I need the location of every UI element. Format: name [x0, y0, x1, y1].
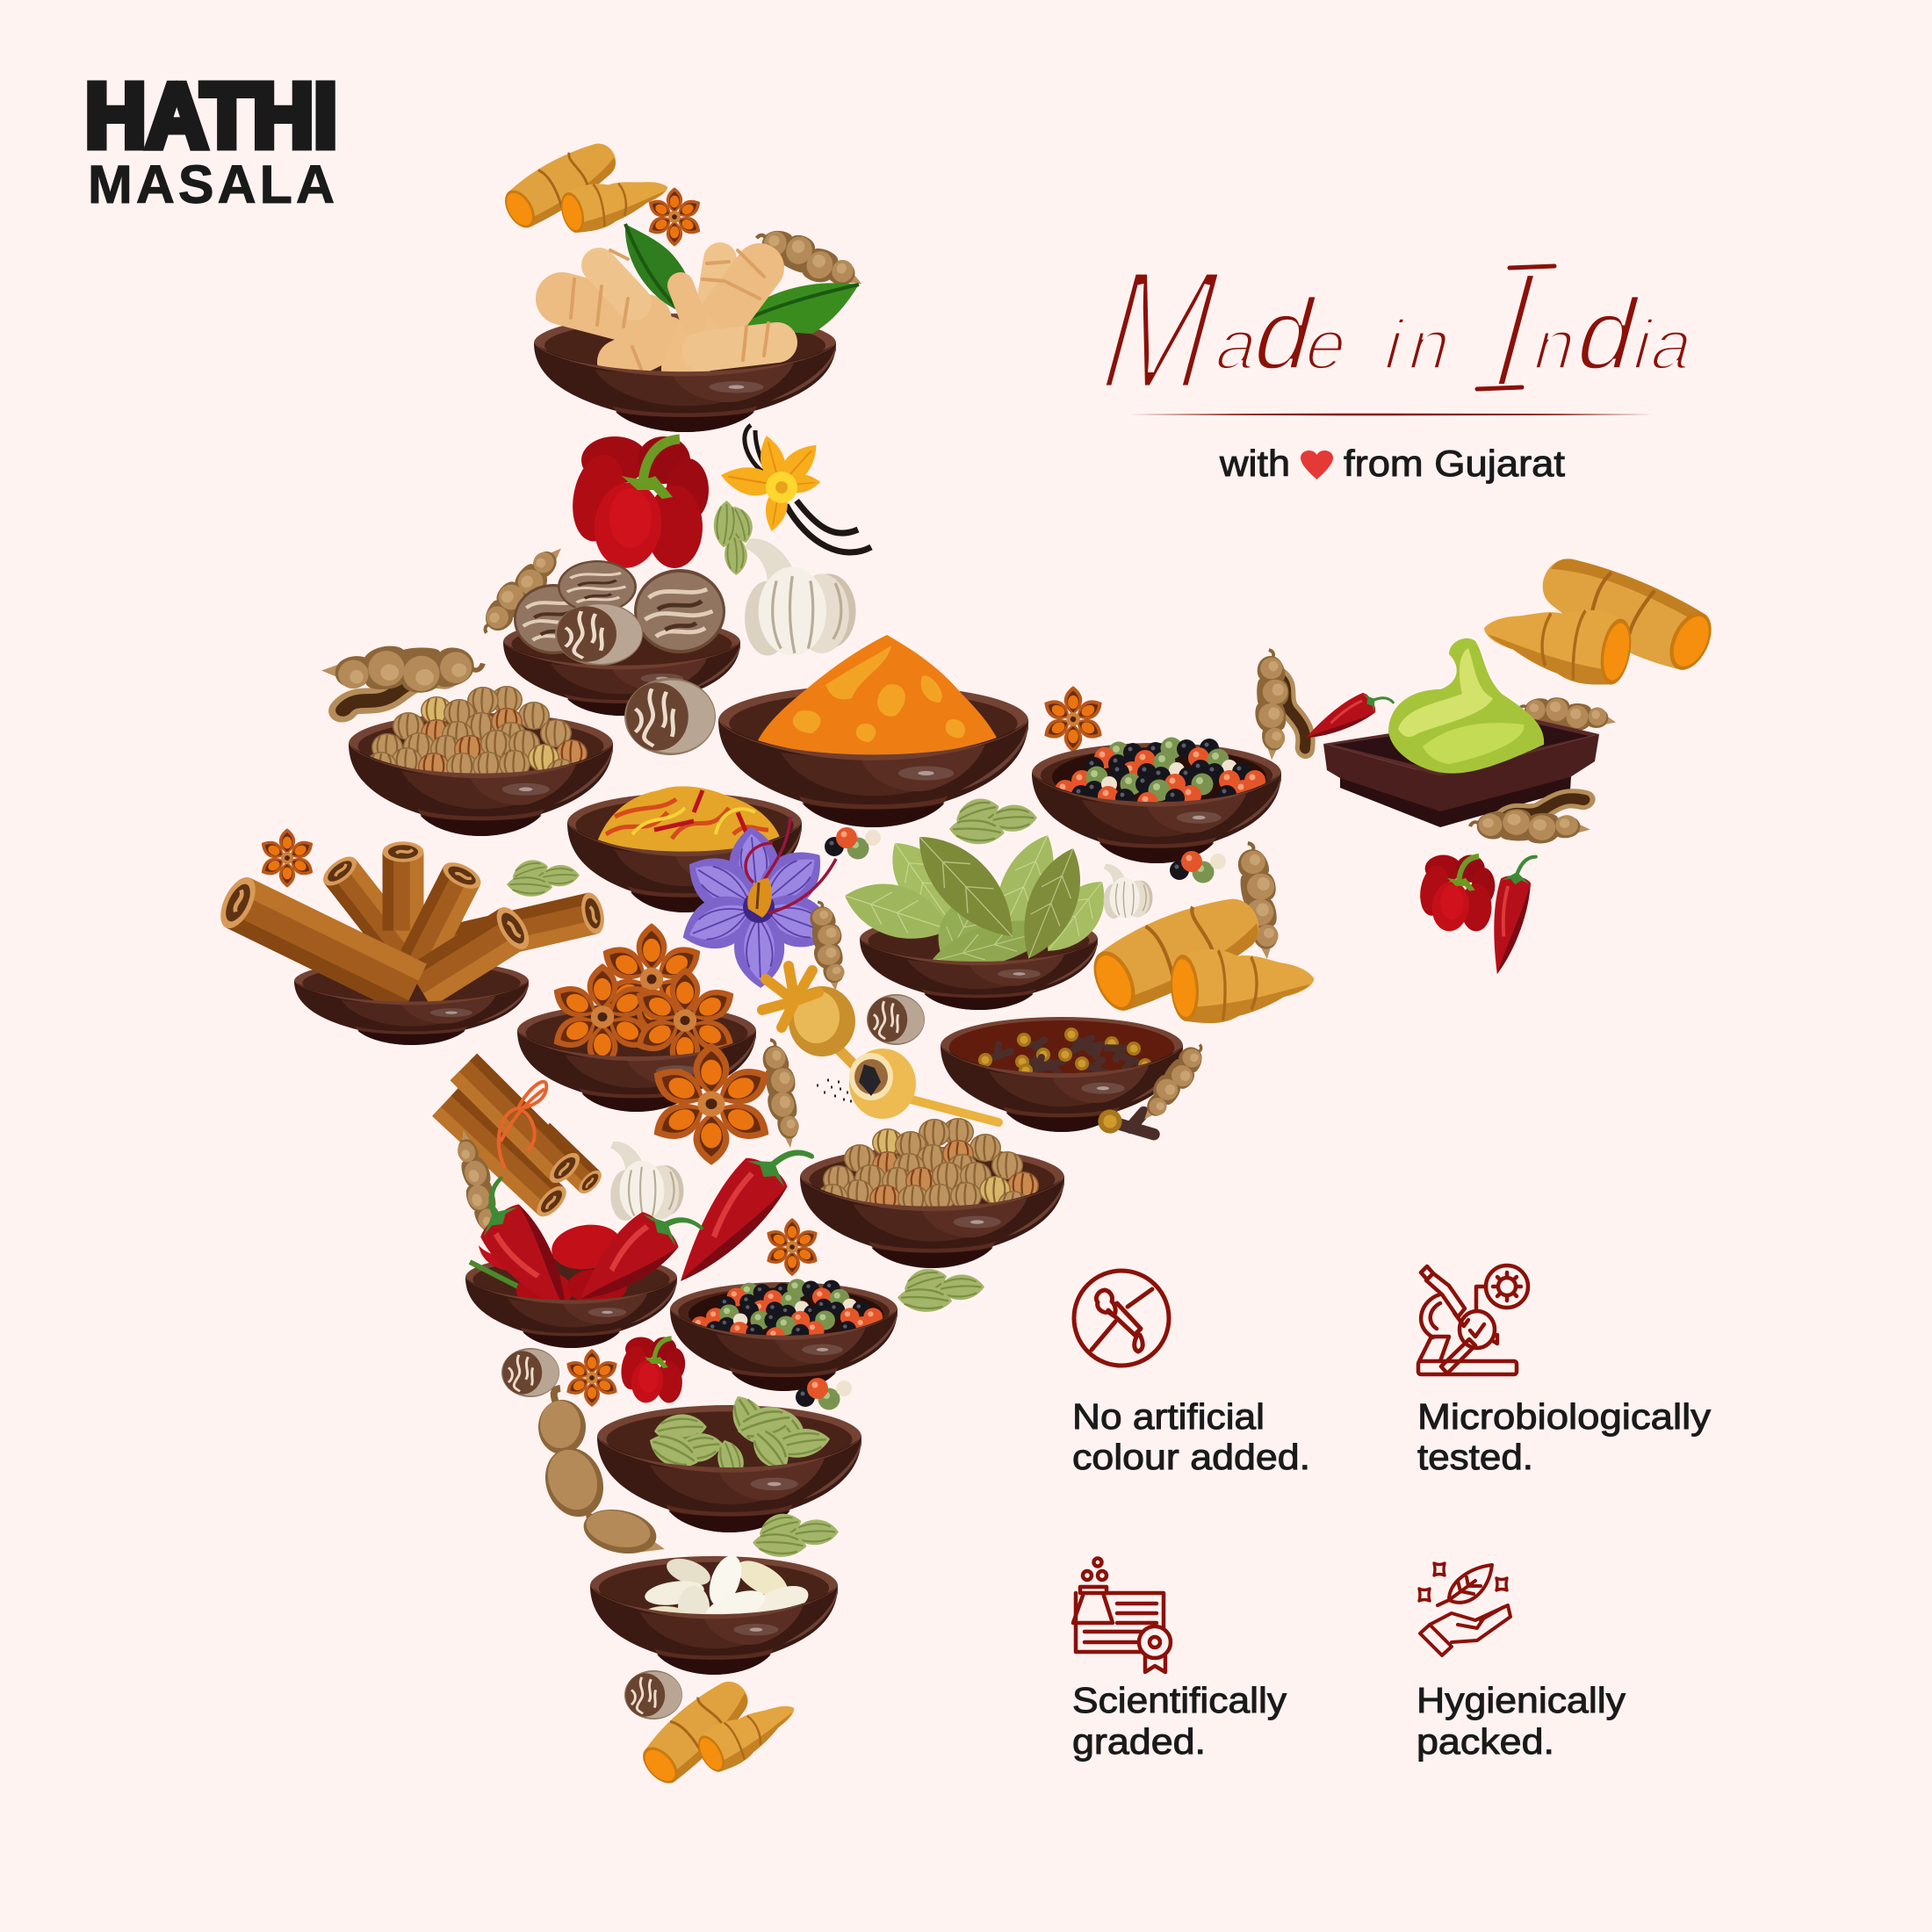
tagline: with love from Gujarat: with [1219, 443, 1290, 484]
cardamom: near cinnamon [506, 855, 580, 898]
turmeric pair: large [1478, 544, 1721, 690]
chili: large [665, 1125, 811, 1301]
bowl: nutmeg [503, 560, 740, 716]
Gujarat cluster: right of the map [1253, 544, 1721, 977]
vanilla flower and pods [718, 425, 871, 552]
cinnamon bundle with ribbon [432, 1054, 605, 1222]
text: Scientifically graded: Scientifically [1072, 1680, 1287, 1720]
tamarind: beside anise [756, 1037, 808, 1150]
cardamom: vertical [712, 500, 757, 576]
star anise: left [257, 828, 317, 888]
bowl: cloves [941, 1017, 1183, 1132]
cardamom: below bowl [752, 1509, 840, 1559]
text: No artificial colour added: colour added. [1072, 1437, 1310, 1477]
logo: Hathi Masala: HATHI [85, 65, 337, 166]
bowl: mixed peppercorns [1032, 738, 1281, 863]
feature: scientifically graded [1072, 1558, 1287, 1762]
logo: Hathi Masala [85, 65, 337, 214]
peppercorn cluster: lower [796, 1378, 852, 1410]
heading: Made in India: ndia [1524, 278, 1712, 391]
nutmeg: centre small [867, 994, 925, 1045]
text: Hygienically packed: Hygienically [1417, 1680, 1626, 1720]
garlic: small right [1104, 864, 1152, 919]
heading: Made in India: I [1467, 234, 1566, 426]
heading: Made in India: M [1082, 234, 1242, 426]
feature: hygienically packed [1417, 1563, 1626, 1762]
bowl: bay leaves [838, 818, 1120, 1010]
nutmeg: lower left [501, 1348, 559, 1397]
turmeric pair: bottom [633, 1669, 804, 1791]
chili: tall [1486, 852, 1536, 977]
tagline: with love from Gujarat [1219, 443, 1565, 484]
bell pepper: lower [618, 1337, 685, 1405]
text: Hygienically packed [1417, 1680, 1626, 1762]
bowl: ginger [534, 224, 859, 432]
turmeric pair: middle right [1083, 882, 1316, 1026]
bowl: coriander seeds lower [800, 1118, 1064, 1268]
star anise: top [645, 187, 704, 247]
text: No artificial colour added [1072, 1396, 1310, 1477]
bowl: garlic cloves [590, 1551, 838, 1675]
peppercorn cluster: right [1170, 851, 1226, 883]
heading: Made in India: in [1376, 306, 1460, 385]
tamarind: top [750, 220, 870, 299]
text: Microbiologically tested: tested. [1417, 1437, 1533, 1477]
bowl: red chillies [458, 1179, 701, 1348]
text: Hygienically packed: packed. [1417, 1721, 1554, 1762]
text: No artificial colour added: No artificial [1072, 1396, 1265, 1437]
feature: no artificial colour [1072, 1271, 1310, 1477]
tamarind: above tray right [1517, 693, 1618, 736]
tamarind: beside saffron [804, 898, 853, 993]
text: Scientifically graded: graded. [1072, 1721, 1206, 1762]
tamarind pods: upper left [321, 641, 484, 711]
star anise: small above peppercorns [763, 1218, 821, 1276]
bowl: mixed peppercorns lower [670, 1279, 898, 1391]
text: Scientifically graded [1072, 1680, 1287, 1762]
feature: microbiologically tested [1417, 1265, 1712, 1477]
icon: crossed-out dropper [1074, 1271, 1169, 1366]
text: Microbiologically tested [1417, 1396, 1712, 1477]
tamarind pods: below tray [1470, 795, 1590, 844]
bowl: orange turmeric powder [718, 635, 1028, 827]
bell pepper: small [1417, 855, 1495, 934]
icon: flask and certificate [1073, 1558, 1171, 1672]
bell pepper: large [566, 436, 709, 573]
bowl: cardamom [597, 1389, 861, 1532]
bowl: coriander seeds [349, 686, 613, 836]
heading: Made in India [1082, 234, 1712, 426]
peppercorn cluster: centre [825, 827, 881, 859]
icon: hand holding leaf [1419, 1563, 1510, 1655]
star anise: lower [563, 1349, 621, 1407]
bowl: star anise [517, 923, 756, 1112]
tamarind: left of nutmeg bowl [472, 536, 573, 644]
tray with green wasabi [1323, 638, 1599, 827]
nutmeg: bottom [624, 1670, 682, 1719]
heading: Made in India: ade [1206, 278, 1365, 391]
nutmeg: single [624, 678, 716, 755]
text: Microbiologically tested: Microbiologically [1417, 1396, 1712, 1437]
chili: small by tray [1301, 681, 1393, 752]
poppy pods and seeds [762, 966, 998, 1122]
cardamom: above bay bowl [948, 793, 1038, 846]
saffron flower [674, 817, 842, 989]
garlic: large [745, 538, 855, 655]
heading underline [1128, 414, 1654, 415]
icon: microscope with virus [1418, 1265, 1528, 1374]
tamarind: right of garlic [1230, 840, 1288, 962]
cardamom: right of peppercorn bowl [897, 1264, 985, 1314]
tamarind: above tray left [1253, 649, 1309, 761]
tamarind: left of chili bowl [447, 1126, 508, 1242]
bowl: cinnamon sticks [213, 841, 608, 1045]
garlic: small south [610, 1142, 683, 1221]
tamarind: large lower [536, 1388, 665, 1560]
tamarind: right of clove bowl [1134, 1036, 1213, 1129]
turmeric pair: top [497, 132, 674, 237]
star anise: large [645, 1042, 778, 1165]
tagline: with love from Gujarat: from Gujarat [1344, 443, 1565, 484]
clove: single [1097, 1108, 1156, 1137]
star anise: right of powder bowl [1040, 686, 1107, 753]
bowl: saffron [567, 786, 802, 912]
map of India built from spices [213, 132, 1316, 1791]
logo: Hathi Masala: MASALA [88, 155, 335, 214]
